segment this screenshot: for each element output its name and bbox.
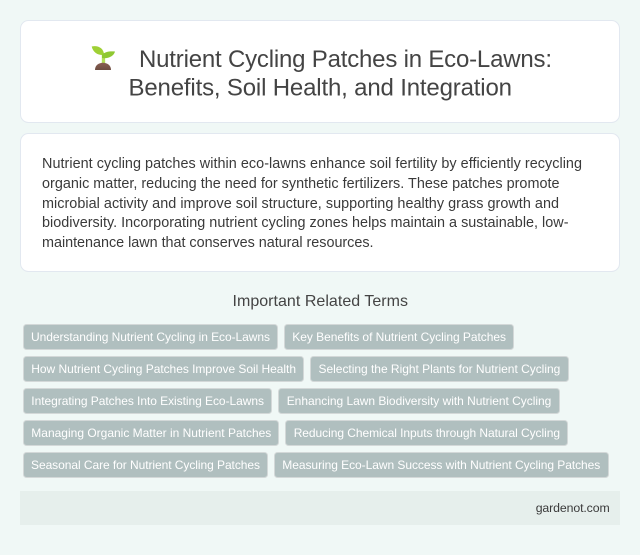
tag	[278, 388, 560, 414]
intro paragraph: microbial activity and improve soil structure, supporting healthy grass growth and	[42, 196, 559, 212]
tag	[24, 452, 268, 478]
footer bar	[20, 491, 620, 525]
tag: Selecting the Right Plants for Nutrient Cycling	[318, 362, 560, 376]
tag: Key Benefits of Nutrient Cycling Patches	[292, 330, 506, 344]
tag: Enhancing Lawn Biodiversity with Nutrient Cycling	[287, 394, 551, 408]
related terms tags	[24, 324, 608, 478]
tag	[24, 388, 272, 414]
intro paragraph: organic matter, reducing the need for synthetic fertilizers. These patches promote	[42, 176, 560, 192]
related terms heading: Important Related Terms	[232, 293, 408, 310]
tag: Integrating Patches Into Existing Eco-Lawns	[31, 394, 264, 408]
intro paragraph: Nutrient cycling patches within eco-lawns enhance soil fertility by efficiently recycling	[42, 156, 582, 172]
header panel	[20, 20, 620, 122]
tag: Measuring Eco-Lawn Success with Nutrient Cycling Patches	[282, 458, 600, 472]
tag: Seasonal Care for Nutrient Cycling Patches	[31, 458, 260, 472]
tag	[24, 356, 304, 382]
tag: Reducing Chemical Inputs through Natural Cycling	[294, 426, 560, 440]
tag	[310, 356, 568, 382]
tag	[284, 324, 514, 350]
tag: Managing Organic Matter in Nutrient Patches	[31, 426, 271, 440]
title: Nutrient Cycling Patches in Eco-Lawns:	[139, 46, 552, 73]
title	[128, 46, 552, 102]
tag: How Nutrient Cycling Patches Improve Soil Health	[31, 362, 296, 376]
intro paragraph: biodiversity. Incorporating nutrient cycling zones helps maintain a sustainable, low-	[42, 215, 569, 231]
tag	[24, 324, 278, 350]
source text: gardenot.com	[536, 501, 610, 515]
tag: Understanding Nutrient Cycling in Eco-Lawns	[31, 330, 270, 344]
intro paragraph	[42, 156, 582, 251]
icon: seedling	[92, 46, 115, 70]
intro text panel	[20, 134, 620, 272]
title: Benefits, Soil Health, and Integration	[128, 74, 512, 102]
tag	[274, 452, 608, 478]
tag	[286, 420, 568, 446]
intro paragraph: maintenance lawn that conserves natural resources.	[42, 235, 374, 251]
tag	[24, 420, 278, 446]
